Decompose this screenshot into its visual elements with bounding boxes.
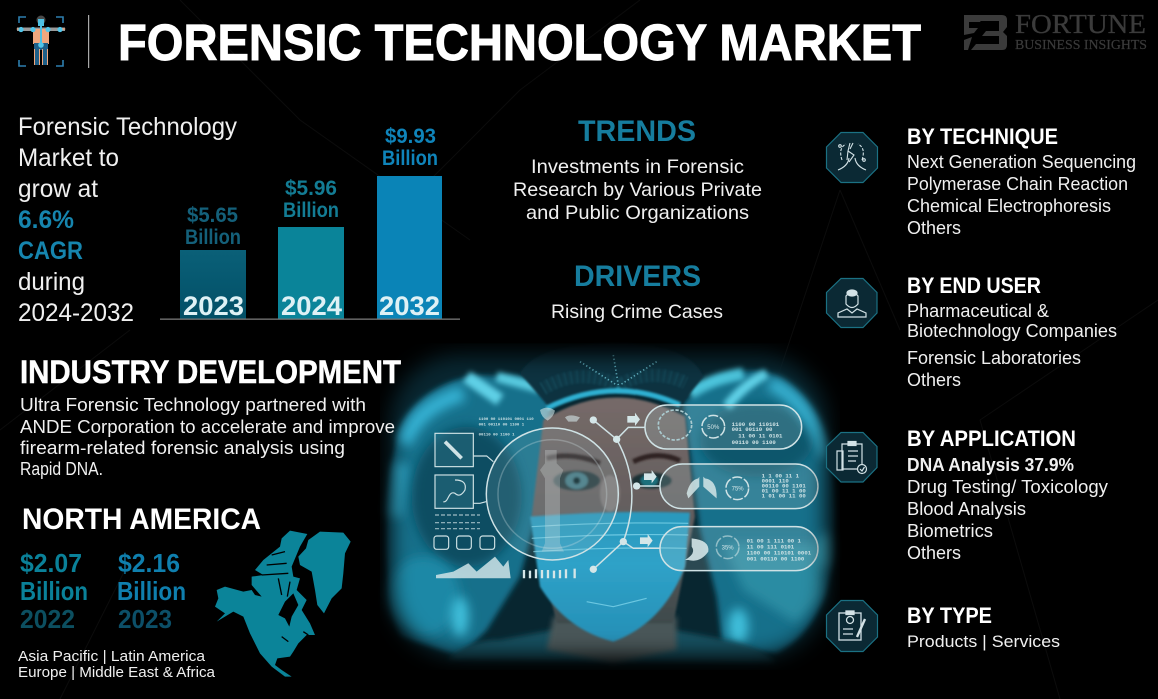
logo: Fortune Business Insights: [964, 9, 1147, 53]
hologram: stomach pill: 11 00 111 0101: [747, 543, 795, 550]
heading and list: by technique: [907, 124, 1136, 238]
stat: north america 2023: Billion: [117, 576, 186, 606]
neck and shoulders: [447, 630, 777, 663]
title: FORENSIC TECHNOLOGY MARKET: [118, 14, 921, 71]
bar chart: market size: $5.65: [187, 204, 238, 227]
heading and list: by end user: Pharmaceutical &: [907, 301, 1049, 321]
heading and list: by application: Others: [907, 543, 961, 563]
stat: north america 2023: [117, 548, 186, 634]
heading and list: by technique: Next Generation Sequencing: [907, 152, 1136, 172]
hologram: lungs pill: 1 01 00 11 00: [762, 493, 806, 500]
bar chart: market size: Billion: [185, 226, 241, 249]
icon: application clipboard: [826, 432, 877, 482]
text block: trends detail: Research by Various Private: [513, 179, 762, 201]
text block: market growth summary: Market to: [18, 144, 119, 172]
stat: north america 2022: Billion: [20, 576, 88, 606]
bar chart: market size: 2023: [183, 291, 244, 321]
text block: industry development detail: firearm-related forensic analysis using: [20, 438, 345, 458]
text block: trends detail: and Public Organizations: [526, 202, 749, 224]
photo: forensic scientist with holographic display: [380, 343, 840, 670]
surgical cap: [520, 354, 704, 411]
stat: north america 2023: 2023: [118, 604, 172, 634]
hologram: stomach pill: 35%: [722, 545, 734, 551]
hologram: left panels: [434, 433, 495, 549]
heading and list: by end user: [907, 273, 1117, 390]
heading and list: by end user: Others: [907, 370, 961, 390]
heading and list: by technique: Polymerase Chain Reaction: [907, 174, 1128, 194]
text block: industry development detail: Ultra Forensic Technology partnered with: [20, 395, 366, 415]
heading and list: by technique: Others: [907, 218, 961, 238]
text block: other regions: [18, 648, 216, 681]
hologram: stomach pill: 001 00110 00 1100: [747, 555, 805, 562]
hologram: central lens: [486, 420, 660, 569]
bar chart: market size: $9.93: [385, 125, 436, 148]
heading and list: by end user: BY END USER: [907, 273, 1041, 298]
bar chart: market size: 2024: [281, 291, 342, 321]
hologram: lungs pill: 00110 00 1101: [762, 483, 806, 490]
heading and list: by application: Blood Analysis: [907, 499, 1026, 519]
heading and list: by application: Drug Testing/ Toxicology: [907, 477, 1108, 497]
text block: market growth summary: CAGR: [18, 237, 83, 265]
hologram: figure: [540, 450, 564, 552]
hologram: stomach pill: 1100 00 110101 0001: [747, 550, 812, 557]
surgical mask: [530, 512, 690, 642]
heading: trends: TRENDS: [578, 115, 696, 148]
heading and list: by application: Biometrics: [907, 521, 993, 541]
heading and list: by type: BY TYPE: [907, 603, 992, 628]
hologram: stomach pill: 01 00 1 111 00 1: [747, 538, 802, 545]
text block: market growth summary: [18, 113, 237, 327]
heading and list: by type: Products | Services: [907, 632, 1060, 651]
stat: north america 2023: $2.16: [118, 548, 180, 578]
eyes: [547, 456, 680, 512]
hologram: lungs pill: 1 1 00 11 1: [762, 472, 800, 479]
stat: north america 2022: [20, 548, 88, 634]
icon: human body scan: [16, 16, 66, 66]
hologram: brain pill: 50%: [707, 425, 720, 431]
hologram: lungs pill: 0001 110: [762, 478, 789, 485]
hologram: small data text: 1100 00 110101 0001 110: [479, 418, 534, 422]
text block: industry development detail: ANDE Corporation to accelerate and improve: [20, 417, 395, 437]
hologram: small data text: [479, 418, 534, 437]
bar chart: market size: Billion: [382, 147, 438, 170]
hologram: brain pill: 11 00 11 0101: [738, 433, 783, 440]
hologram: small data text: 00110 00 1100 1: [479, 433, 515, 437]
text block: trends detail: [513, 156, 762, 224]
text block: drivers detail: Rising Crime Cases: [551, 301, 723, 323]
hologram: brain pill: 1100 00 110101: [732, 421, 780, 428]
glove: right hand: [683, 371, 836, 653]
bar chart: market size: $5.96: [285, 177, 337, 200]
logo: Fortune Business Insights: BUSINESS INSIGHTS: [1015, 38, 1147, 53]
stat: north america 2022: $2.07: [20, 548, 82, 578]
text block: trends detail: Investments in Forensic: [531, 156, 744, 178]
hologram: stomach pill: [660, 527, 818, 571]
hologram: lungs pill: [660, 464, 818, 509]
text block: market growth summary: during: [18, 268, 85, 296]
heading and list: by technique: Chemical Electrophoresis: [907, 196, 1111, 216]
icon: type clipboard with pen: [826, 600, 878, 652]
heading and list: by end user: Forensic Laboratories: [907, 348, 1081, 368]
heading and list: by end user: Biotechnology Companies: [907, 321, 1117, 341]
text block: market growth summary: grow at: [18, 175, 98, 203]
heading: drivers: DRIVERS: [574, 260, 701, 293]
bar chart: market size: 2032: [379, 291, 440, 321]
logo: Fortune Business Insights: FORTUNE: [1015, 9, 1146, 39]
text block: industry development detail: [20, 395, 395, 479]
hologram: brain pill: 00110 00 1100: [732, 439, 776, 446]
hologram: brain pill: 001 00110 00: [732, 426, 773, 433]
text block: market growth summary: 6.6%: [18, 206, 74, 234]
hologram: chart: [436, 557, 511, 578]
heading and list: by application: BY APPLICATION: [907, 426, 1076, 451]
icon: technique DNA head: [826, 132, 878, 182]
heading and list: by application: [907, 426, 1108, 563]
heading and list: by application: DNA Analysis 37.9%: [907, 455, 1074, 475]
heading: north america: NORTH AMERICA: [22, 503, 261, 536]
stat: north america 2022: 2022: [20, 604, 75, 634]
hologram: small data text: 001 00110 00 1100 1: [479, 424, 525, 428]
heading and list: by technique: BY TECHNIQUE: [907, 124, 1058, 149]
heading: industry development: INDUSTRY DEVELOPMENT: [20, 354, 401, 390]
bar chart: market size: Billion: [283, 199, 339, 222]
hologram: brain pill: [645, 405, 802, 449]
text block: other regions: Asia Pacific | Latin America: [18, 648, 206, 665]
text block: market growth summary: Forensic Technology: [18, 113, 237, 141]
text block: other regions: Europe | Middle East & Africa: [18, 664, 216, 681]
hologram: lungs pill: 01 00 11 1 00: [762, 488, 806, 495]
glove: left hand: [386, 376, 550, 657]
bar chart: market size: [160, 125, 460, 321]
heading and list: by type: [907, 603, 1060, 651]
icon: end user technician: [826, 278, 877, 328]
text block: market growth summary: 2024-2032: [18, 299, 134, 327]
text block: industry development detail: Rapid DNA.: [20, 459, 103, 479]
hologram: lungs pill: 75%: [732, 486, 744, 492]
map: north america: [215, 531, 351, 677]
face: [532, 397, 695, 623]
